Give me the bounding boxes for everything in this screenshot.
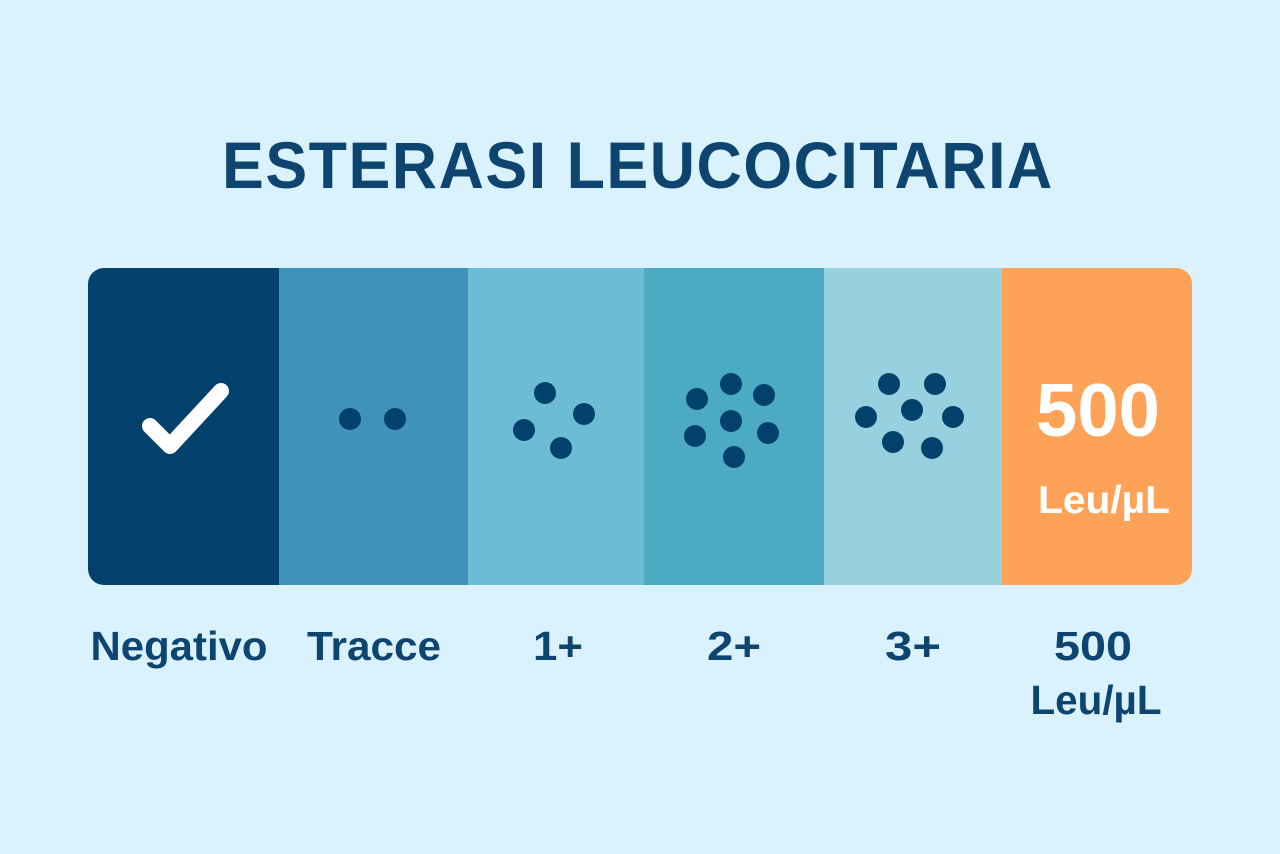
title: ESTERASI LEUCOCITARIA [222,129,1054,202]
label: 500 Leu/µL: Leu/µL [1030,677,1162,723]
infographic [88,142,1192,722]
label: 2+: 2+ [707,623,761,669]
label: 1+: 1+ [533,623,583,669]
panel: negativo [88,268,279,585]
label: Tracce: Tracce [307,623,441,669]
panel: 500 [1002,268,1192,585]
value: 500: 500 [1036,368,1160,452]
label: 500 Leu/µL: 500 [1054,623,1132,669]
label: 500 Leu/µL [1030,623,1162,723]
dots: 3+ [855,373,964,459]
icon: check mark [150,391,221,446]
dots: tracce [339,408,406,430]
panel: 3+ [824,268,1002,585]
panel: 1+ [468,268,644,585]
panel: 2+ [644,268,824,585]
label: Negativo: Negativo [90,623,268,669]
scale bar [88,268,1192,585]
dots: 2+ [684,373,779,468]
unit: Leu/µL: Leu/µL [1038,479,1170,522]
dots: 1+ [513,382,595,459]
panel: tracce [279,268,468,585]
label: 3+: 3+ [885,623,941,669]
